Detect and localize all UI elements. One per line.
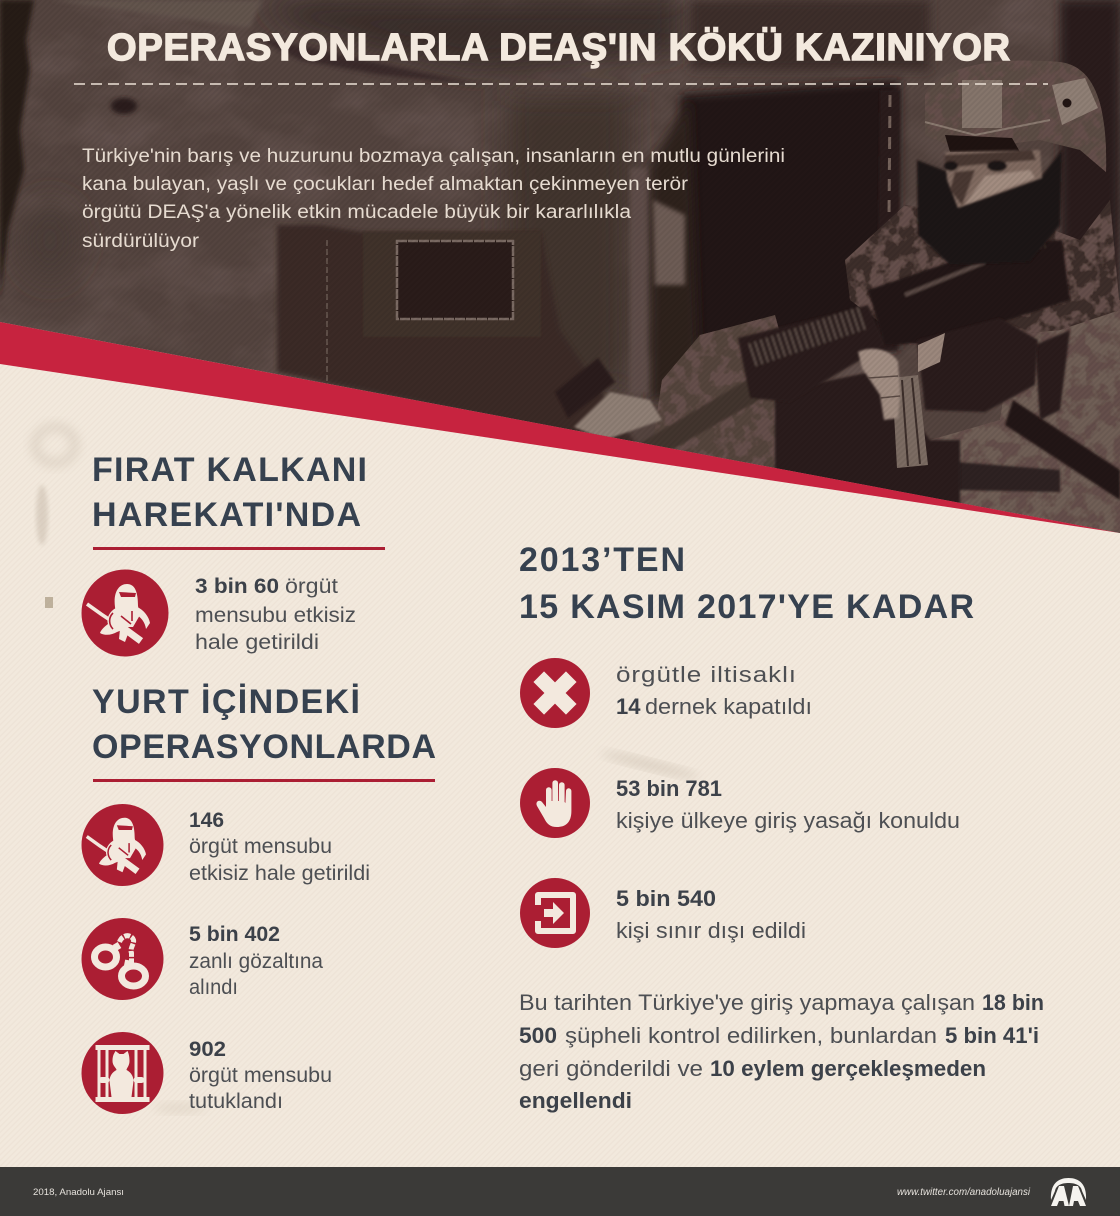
stat: 14 dernek: dernek kapatıldı [645, 694, 812, 719]
footer bar [0, 1167, 1120, 1216]
text block: summary paragraph: 18 bin [982, 990, 1044, 1015]
heading: Yurt içindeki operasyonlarda [92, 683, 436, 766]
intro text block: kana bulayan, yaşlı ve çocukları hedef almaktan çekinmeyen terör [82, 174, 689, 195]
title dashed divider [74, 83, 1048, 85]
magazine [892, 375, 928, 468]
stat: 14 dernek: 14 [616, 694, 641, 719]
box on wall [277, 225, 640, 450]
text block: summary paragraph: engellendi [519, 1088, 632, 1113]
stat: 3 bin 60: hale getirildi [195, 630, 319, 654]
heading: date range: 15 KASIM 2017'YE KADAR [519, 588, 974, 626]
stat: 902: örgüt mensubu [189, 1064, 332, 1087]
face [944, 150, 1042, 208]
stat: 14 dernek: örgütle iltisaklı [616, 662, 797, 687]
text block: summary paragraph: şüpheli kontrol edilirken, bunlardan [565, 1023, 937, 1048]
stat: 5 bin 540: kişi sınır dışı edildi [616, 918, 806, 943]
heading: Fırat Kalkanı Harekatı'nda: FIRAT KALKANI [92, 451, 367, 489]
mask [917, 150, 1062, 265]
stat: 5 bin 402: alındı [189, 976, 238, 999]
heading: date range: 2013’TEN [519, 541, 685, 579]
stat: 5 bin 540: 5 bin 540 [616, 886, 716, 911]
panel: Yurt içindeki operasyonlar [82, 683, 436, 1114]
text block: summary paragraph: geri gönderildi ve [519, 1056, 703, 1081]
camo uniform on lower right [931, 300, 1120, 533]
sling and belt [1005, 400, 1120, 500]
shoulder camo [845, 200, 1120, 345]
icon: cross [520, 658, 590, 728]
footer twitter address: www.twitter.com/anadoluajansi [897, 1187, 1031, 1198]
text block: summary paragraph [519, 990, 1044, 1113]
helmet [925, 61, 1106, 172]
icon: stop hand [520, 768, 590, 838]
left-arm camo [654, 315, 778, 468]
text block: summary paragraph: 5 bin 41'i [945, 1023, 1039, 1048]
vertical post [877, 90, 900, 350]
glove and forearm [917, 318, 1038, 412]
text block: summary paragraph: Bu tarihten Türkiye'ye giriş yapmaya çalışan [519, 990, 975, 1015]
text block: summary paragraph: 10 eylem gerçekleşmeden [710, 1056, 986, 1081]
stat: 3 bin 60: 3 bin 60 [195, 574, 279, 598]
heading: Fırat Kalkanı Harekatı'nda: HAREKATI'NDA [92, 496, 361, 534]
right background [1060, 0, 1120, 300]
intro text block: sürdürülüyor [82, 231, 200, 252]
stat: 5 bin 540 [616, 886, 806, 943]
left dark crack [0, 0, 34, 300]
stat: 3 bin 60 [195, 574, 356, 654]
stat: 5 bin 402: zanlı gözaltına [189, 950, 323, 973]
stat: 53 bin 781: kişiye ülkeye giriş yasağı konuldu [616, 808, 960, 833]
heading: date range [519, 541, 974, 626]
stat: 53 bin 781 [616, 776, 960, 833]
stat: 3 bin 60: örgüt [285, 574, 338, 598]
intro text block [82, 146, 785, 252]
stat: 5 bin 402 [189, 923, 323, 999]
icon: soldier with rifle [82, 804, 164, 886]
heading: Yurt içindeki operasyonlarda: YURT İÇİNDEKİ [92, 683, 360, 721]
red diagonal band [0, 322, 1120, 533]
stat: 902 [189, 1038, 332, 1113]
hatch overlay [860, 170, 1034, 418]
stat: 146: örgüt mensubu [189, 835, 332, 858]
rifle [625, 240, 1070, 462]
intro text block: Türkiye'nin barış ve huzurunu bozmaya çalışan, insanların en mutlu günlerini [82, 146, 785, 167]
stat: 5 bin 402: 5 bin 402 [189, 923, 280, 946]
icon: soldier with rifle [82, 570, 168, 656]
door frame and shadowed interior [630, 80, 900, 400]
stat: 902: 902 [189, 1038, 226, 1061]
panel: Fırat Kalkanı [82, 451, 385, 656]
footer credit: 2018, Anadolu Ajansı [33, 1187, 124, 1198]
heading: Fırat Kalkanı Harekatı'nda [92, 451, 367, 534]
header photo: soldier in a damaged room [0, 0, 1120, 540]
title: OPERASYONLARLA DEAŞ'IN KÖKÜ KAZINIYOR [107, 26, 1010, 69]
stat: 146: 146 [189, 809, 224, 832]
icon: handcuffs [82, 918, 164, 1000]
heading: Yurt içindeki operasyonlarda: OPERASYONLARDA [92, 728, 436, 766]
hand on rifle [858, 349, 900, 420]
icon: exit door [520, 878, 590, 948]
text block: summary paragraph: 500 [519, 1023, 557, 1048]
stat: 146: etkisiz hale getirildi [189, 862, 370, 885]
stat: 3 bin 60: mensubu etkisiz [195, 603, 356, 627]
stat: 902: tutuklandı [189, 1090, 283, 1113]
stat: 53 bin 781: 53 bin 781 [616, 776, 722, 801]
stat: 14 dernek [616, 662, 812, 719]
paper and dark object [574, 392, 662, 440]
wall tone variation [20, 0, 680, 392]
intro text block: örgütü DEAŞ'a yönelik etkin mücadele büyük bir kararlılıkla [82, 202, 631, 223]
panel: 2013'ten 15 Kasım 2017'ye kadar [519, 541, 1044, 1113]
torso dark [775, 370, 960, 510]
icon: AA logo [1051, 1178, 1086, 1206]
icon: prisoner behind bars [82, 1032, 164, 1114]
stat: 146 [189, 809, 370, 885]
